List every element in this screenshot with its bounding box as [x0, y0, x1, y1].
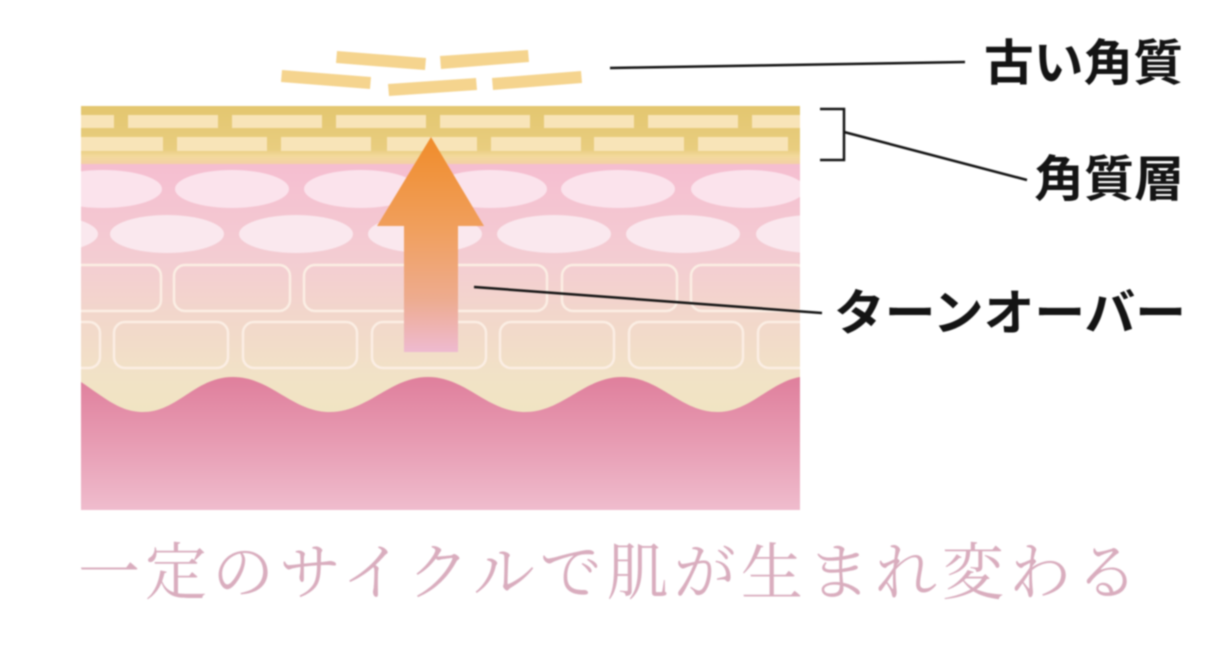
granular cells [80, 170, 800, 254]
spinous cells [80, 263, 800, 370]
leader line: turnover [474, 287, 822, 313]
leader line: stratum corneum [844, 132, 1027, 180]
turnover arrow [377, 137, 484, 352]
label: old stratum corneum: 古い角質 [984, 37, 1183, 91]
bracket: stratum corneum [820, 109, 844, 160]
stratum corneum layer [81, 106, 800, 164]
label: turnover: ターンオーバー [834, 287, 1186, 341]
skin cross-section diagram [0, 106, 872, 510]
leader line: old stratum corneum [610, 62, 965, 68]
caption: 一定のサイクルで肌が生まれ変わる [78, 540, 1138, 608]
label: stratum corneum: 角質層 [1034, 153, 1184, 207]
old flaking skin cells [281, 50, 582, 96]
dermis wave [81, 377, 800, 510]
lower skin layer background [81, 160, 800, 415]
